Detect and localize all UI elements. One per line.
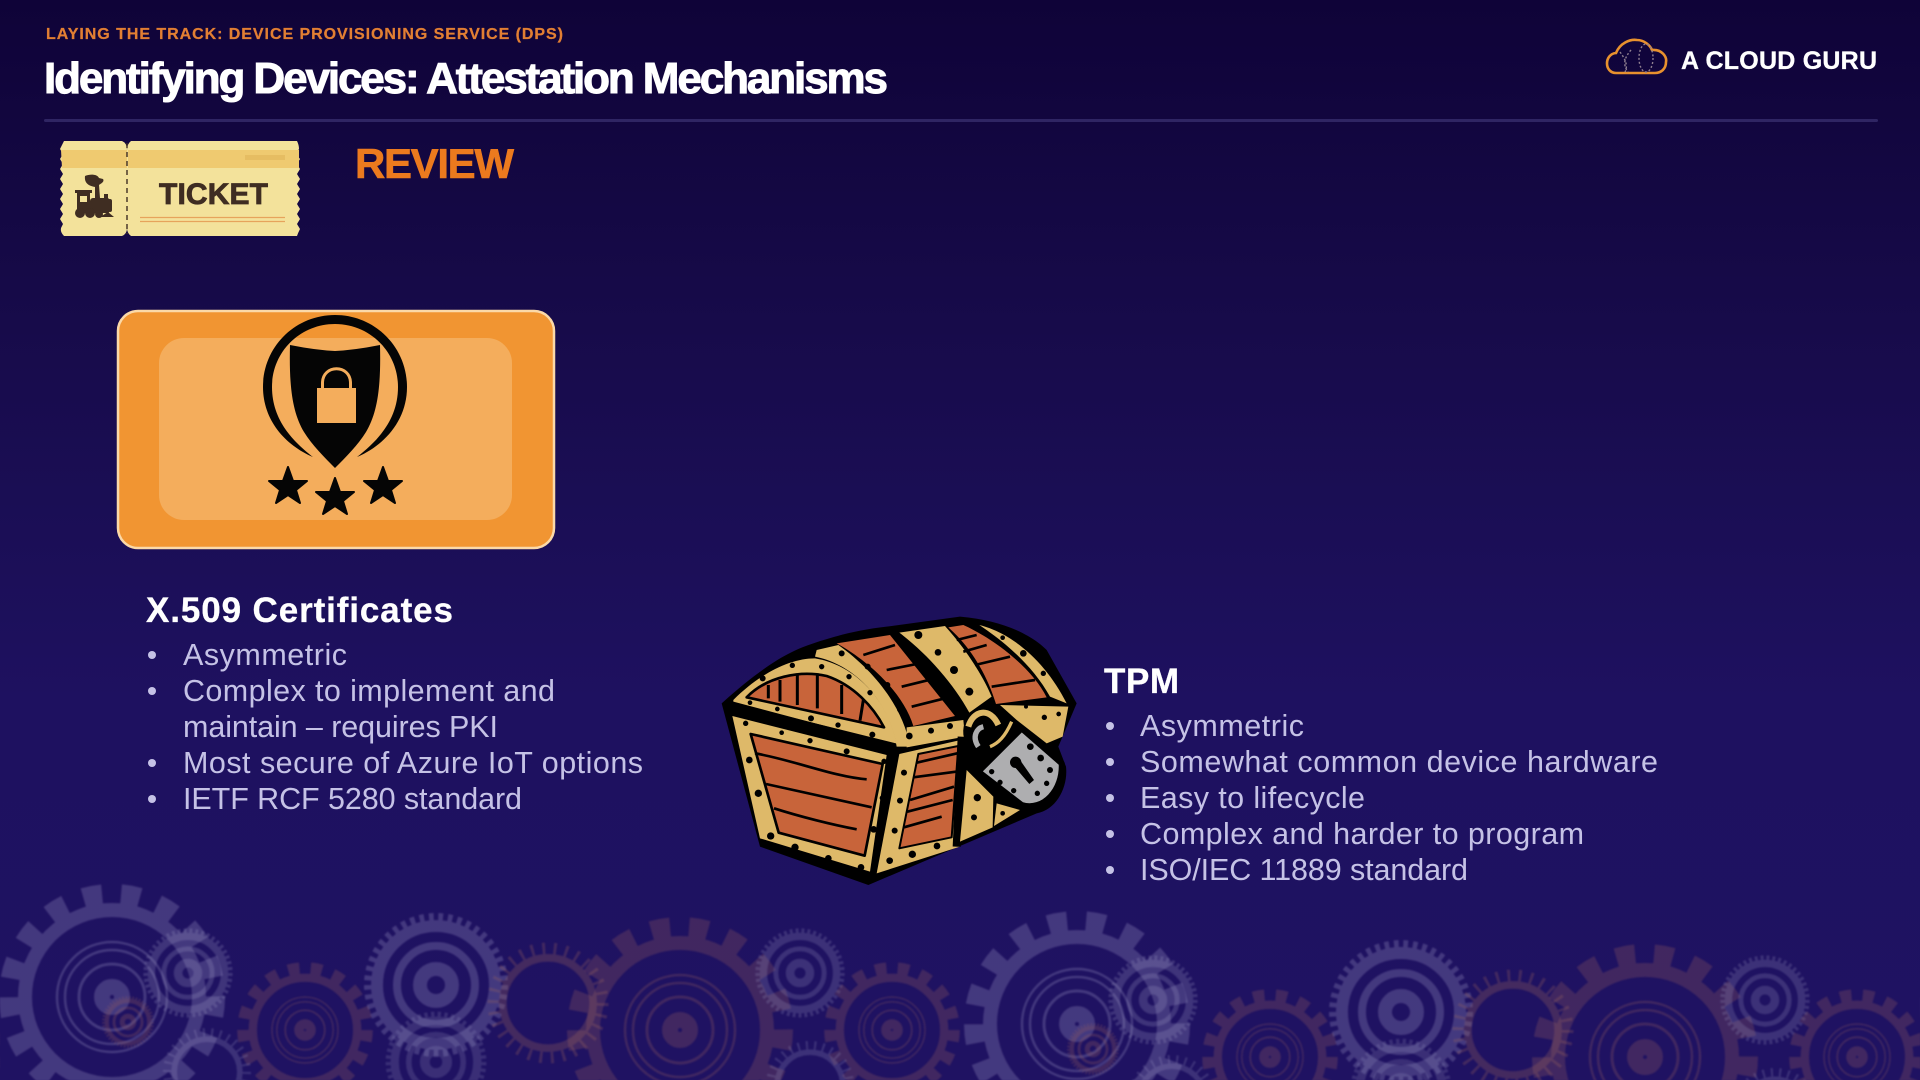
heading: X.509 Certificates: [146, 591, 453, 630]
shield ring: [263, 315, 407, 457]
chest side: [877, 739, 963, 873]
bullet list: maintain – requires PKI: [183, 710, 498, 744]
bullet list: Complex and harder to program: [1140, 817, 1584, 851]
ticket band: [61, 150, 299, 168]
text block: X.509 certificates: [146, 591, 643, 816]
eyebrow heading: LAYING THE TRACK: DEVICE PROVISIONING SERVICE (DPS): [46, 26, 563, 43]
shield: [290, 345, 380, 468]
padlock rivets and keyhole: [989, 743, 1053, 796]
bullet list: Asymmetric: [1140, 709, 1304, 743]
ticket: [60, 141, 300, 236]
bullet list: Somewhat common device hardware: [1140, 745, 1658, 779]
chest lid strap: [899, 626, 992, 713]
logo wordmark: A CLOUD GURU: [1681, 47, 1877, 75]
ticket rules: [140, 218, 285, 222]
chest rivets: [743, 631, 1061, 871]
chest outline: [722, 617, 1077, 885]
chest side right panel: [960, 770, 993, 842]
text block: TPM: [1104, 662, 1658, 887]
bullet list: [1106, 709, 1658, 887]
bullet list: ISO/IEC 11889 standard: [1140, 853, 1468, 887]
bullet list: IETF RCF 5280 standard: [183, 782, 522, 816]
padlock body: [978, 728, 1062, 806]
ticket perforation: [126, 143, 128, 234]
chest lid bar: [727, 707, 897, 749]
review label: REVIEW: [355, 140, 514, 187]
card background: [118, 311, 554, 548]
chest lid top planks: [837, 635, 955, 726]
icon: train: [75, 175, 114, 218]
chest lid top tan: [815, 645, 910, 747]
bullet list: Complex to implement and: [183, 674, 555, 708]
panel: X.509 certificate card: [118, 311, 554, 548]
icon: cloud: [1607, 40, 1666, 73]
card inner panel: [159, 338, 512, 520]
heading: TPM: [1104, 662, 1179, 701]
ticket small print: [245, 155, 285, 160]
bullet list: Most secure of Azure IoT options: [183, 746, 643, 780]
ticket body: [127, 141, 300, 236]
title: Identifying Devices: Attestation Mechanisms: [44, 54, 888, 103]
padlock shackle: [968, 713, 1012, 750]
icon: shield with padlock and stars: [263, 315, 407, 514]
bullet list: Asymmetric: [183, 638, 347, 672]
chest front planks: [751, 734, 883, 856]
ticket label: TICKET: [159, 178, 268, 211]
chest front frame: [732, 716, 887, 872]
bullet list: Easy to lifecycle: [1140, 781, 1365, 815]
chest lid end: [733, 658, 897, 745]
ticket stub: [60, 141, 127, 236]
chest lid rim: [907, 720, 965, 747]
stars: [269, 467, 402, 514]
logo: A Cloud Guru: [1607, 40, 1877, 75]
bullet list: [148, 638, 643, 816]
background gear pattern: [0, 870, 1920, 1080]
chest lid right edge: [979, 625, 1067, 703]
header rule: [44, 119, 1878, 122]
padlock: [317, 369, 356, 423]
chest lid right planks: [948, 625, 1047, 704]
icon: treasure chest with padlock: [722, 617, 1077, 885]
